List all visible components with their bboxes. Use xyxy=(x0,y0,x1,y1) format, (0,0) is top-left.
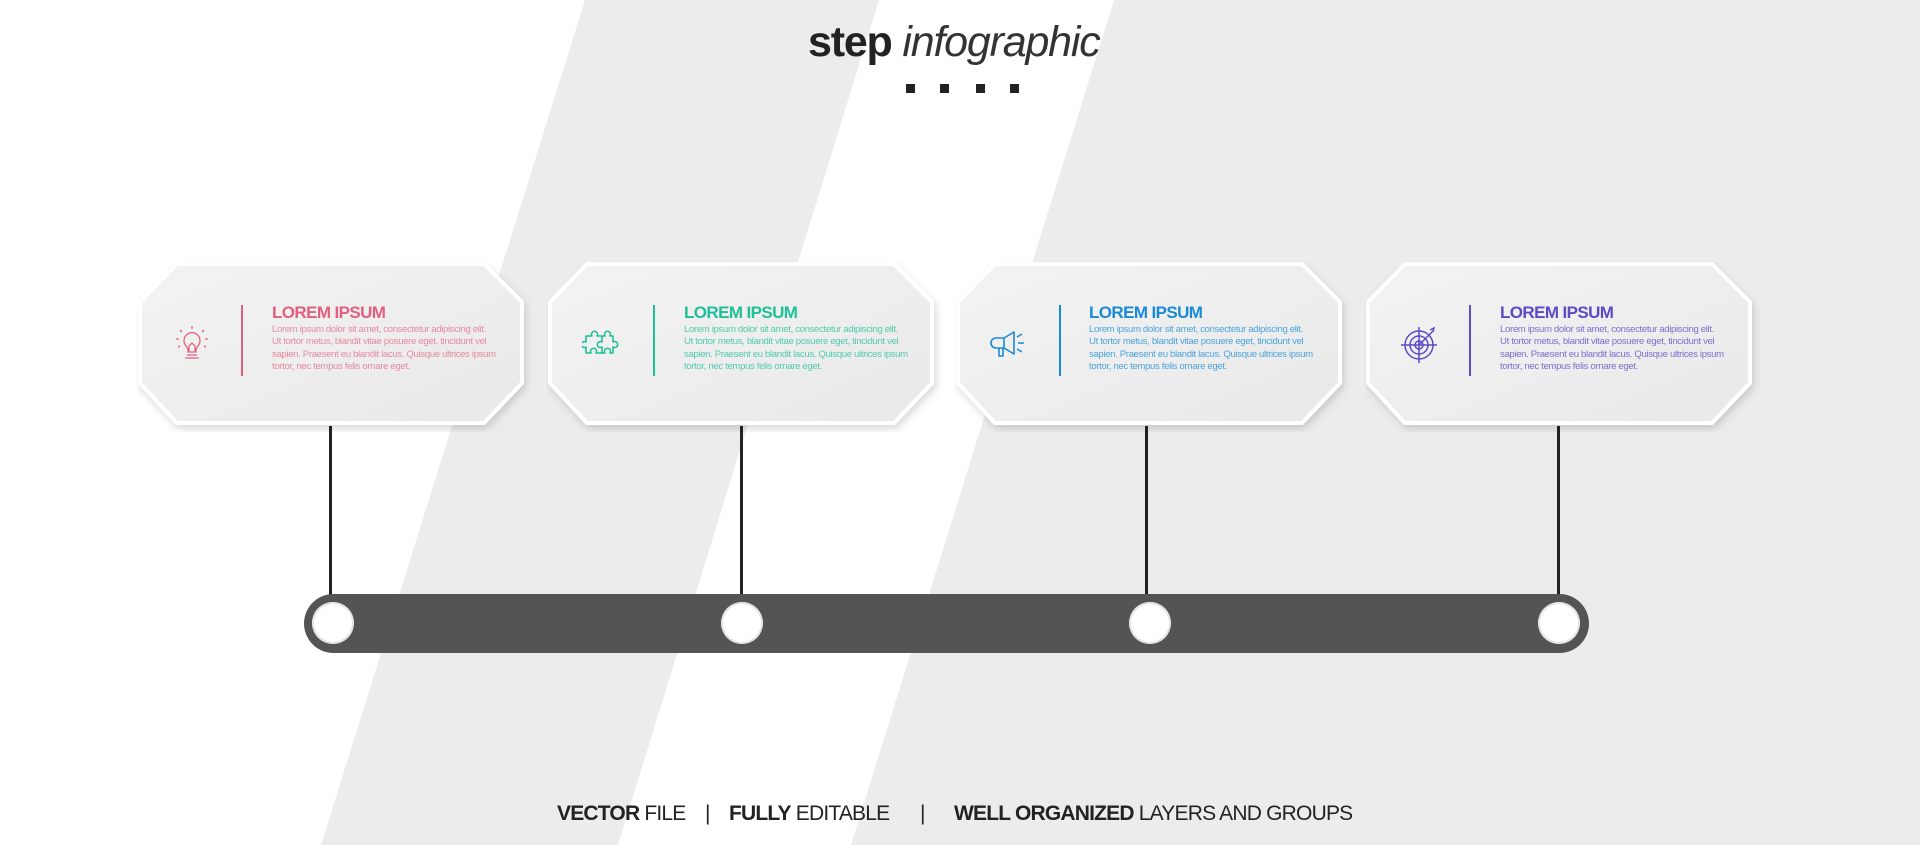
card 1 xyxy=(137,265,528,432)
divider xyxy=(1469,305,1471,376)
footer text xyxy=(557,802,1352,825)
timeline bar xyxy=(304,594,1589,653)
footer text: VECTOR FILE xyxy=(557,802,686,825)
heading: LOREM IPSUM xyxy=(1089,303,1202,322)
body text: Ut tortor metus, blandit vitae posuere eget, tincidunt vel xyxy=(1089,336,1303,347)
body text: sapien. Praesent eu blandit lacus. Quisque ultrices ipsum xyxy=(1089,349,1313,360)
footer text: WELL ORGANIZED LAYERS AND GROUPS xyxy=(954,802,1352,825)
heading: LOREM IPSUM xyxy=(272,303,385,322)
title dots xyxy=(906,84,1019,93)
body text: tortor, nec tempus felis ornare eget. xyxy=(272,361,410,372)
body text: tortor, nec tempus felis ornare eget. xyxy=(1089,361,1227,372)
heading: LOREM IPSUM xyxy=(1500,303,1613,322)
body text: Ut tortor metus, blandit vitae posuere eget, tincidunt vel xyxy=(684,336,898,347)
body text: Lorem ipsum dolor sit amet, consectetur adipiscing elit. xyxy=(1500,324,1714,335)
card 2 xyxy=(548,262,939,432)
body text: Lorem ipsum dolor sit amet, consectetur adipiscing elit. xyxy=(684,324,898,335)
card 3 xyxy=(955,262,1346,432)
footer text: FULLY EDITABLE xyxy=(729,802,889,825)
body text: Ut tortor metus, blandit vitae posuere eget, tincidunt vel xyxy=(272,336,486,347)
icon: target xyxy=(1401,326,1437,363)
divider xyxy=(653,305,655,376)
step dots xyxy=(312,602,1580,644)
icon: puzzle xyxy=(582,330,618,354)
body text: tortor, nec tempus felis ornare eget. xyxy=(684,361,822,372)
body text: Lorem ipsum dolor sit amet, consectetur adipiscing elit. xyxy=(272,324,486,335)
body text: sapien. Praesent eu blandit lacus. Quisque ultrices ipsum xyxy=(1500,349,1724,360)
body text xyxy=(684,324,908,372)
body text: sapien. Praesent eu blandit lacus. Quisque ultrices ipsum xyxy=(684,349,908,360)
body text: Ut tortor metus, blandit vitae posuere eget, tincidunt vel xyxy=(1500,336,1714,347)
body text xyxy=(272,324,496,372)
icon: megaphone xyxy=(990,331,1024,357)
card 4 xyxy=(1366,262,1756,432)
body text: tortor, nec tempus felis ornare eget. xyxy=(1500,361,1638,372)
body text: sapien. Praesent eu blandit lacus. Quisque ultrices ipsum xyxy=(272,349,496,360)
body text: Lorem ipsum dolor sit amet, consectetur adipiscing elit. xyxy=(1089,324,1303,335)
body text xyxy=(1500,324,1724,372)
title: step infographic xyxy=(808,18,1100,66)
icon: light bulb xyxy=(176,326,208,359)
divider xyxy=(241,305,243,376)
heading: LOREM IPSUM xyxy=(684,303,797,322)
footer text: | xyxy=(920,802,925,825)
divider xyxy=(1059,305,1061,376)
footer text: | xyxy=(705,802,710,825)
body text xyxy=(1089,324,1313,372)
connector lines xyxy=(329,426,1560,594)
